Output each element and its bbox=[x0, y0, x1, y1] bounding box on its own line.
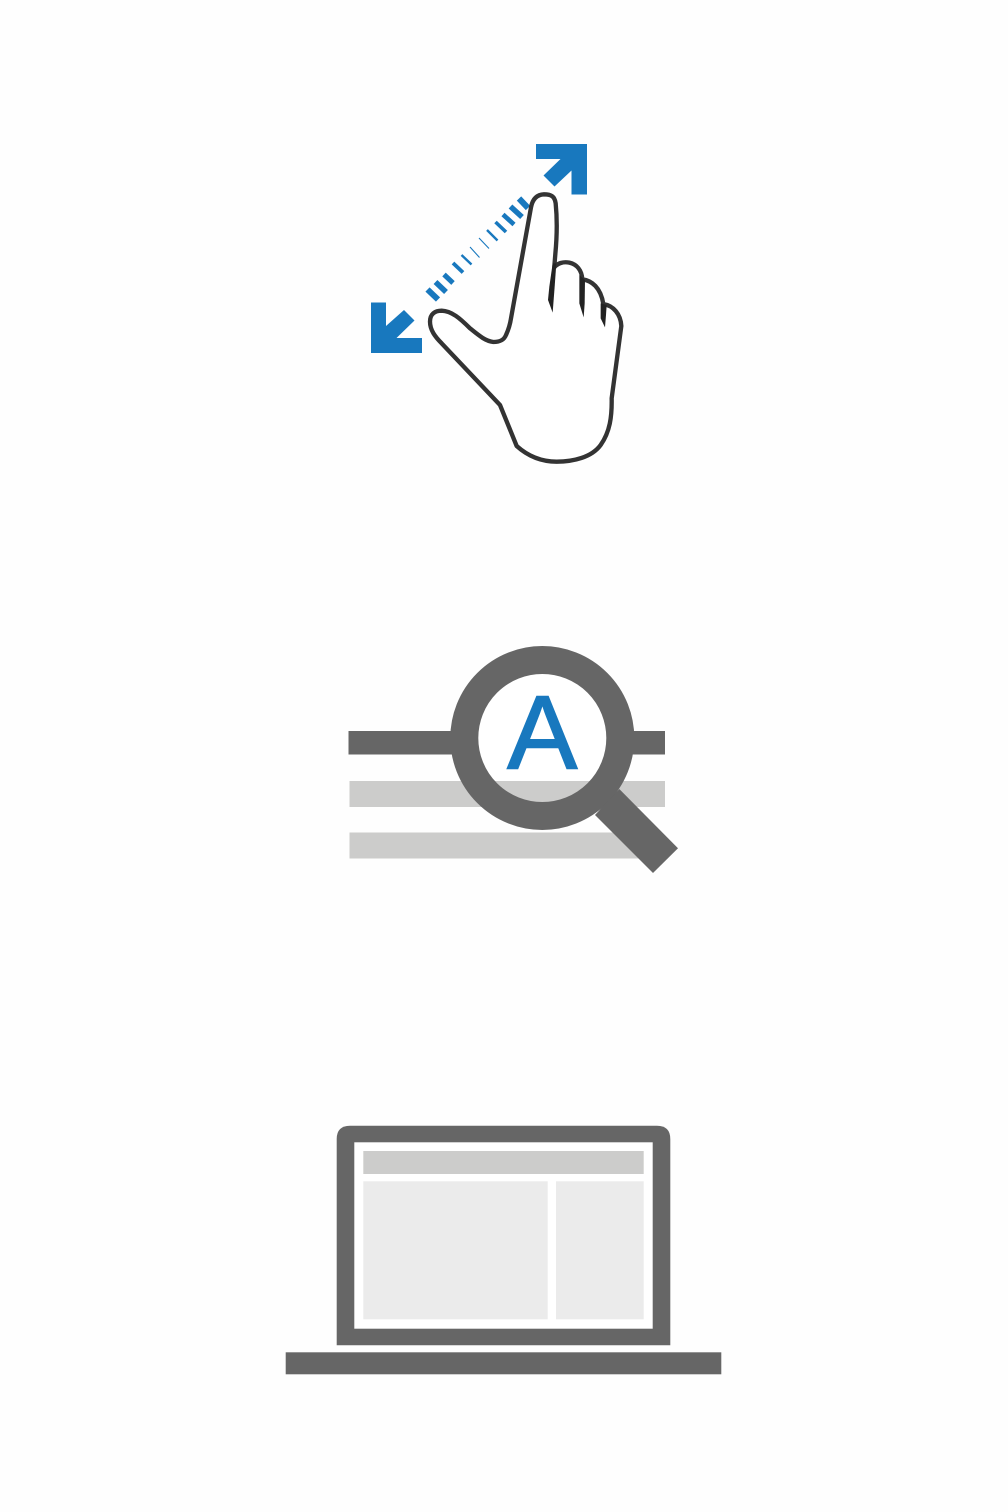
icon: magnifying glass over text lines bbox=[348, 660, 678, 873]
page sidebar column bbox=[556, 1181, 644, 1319]
laptop lid frame bbox=[337, 1126, 670, 1345]
magnified letter A: A bbox=[507, 674, 577, 792]
magnifier handle bbox=[595, 789, 678, 873]
icon: lower-left blue arrow bbox=[371, 302, 422, 353]
hand outline bbox=[430, 194, 621, 462]
dashed zoom line between fingers bbox=[428, 198, 528, 300]
grey text line 1 bbox=[350, 781, 665, 807]
grey text line 2 bbox=[350, 832, 650, 858]
page main column bbox=[363, 1181, 548, 1319]
dark highlighted text line bbox=[348, 731, 665, 754]
magnifier ring bbox=[464, 660, 620, 816]
icon: laptop showing a web page layout bbox=[286, 1126, 721, 1374]
icon: upper-right blue arrow bbox=[536, 144, 587, 194]
icon: pinch-to-zoom hand gesture bbox=[371, 144, 621, 462]
laptop base bbox=[286, 1352, 721, 1374]
lens interior bbox=[476, 672, 608, 804]
finger crease spikes bbox=[548, 263, 607, 327]
laptop screen bbox=[354, 1142, 653, 1329]
page header bar bbox=[363, 1151, 644, 1174]
